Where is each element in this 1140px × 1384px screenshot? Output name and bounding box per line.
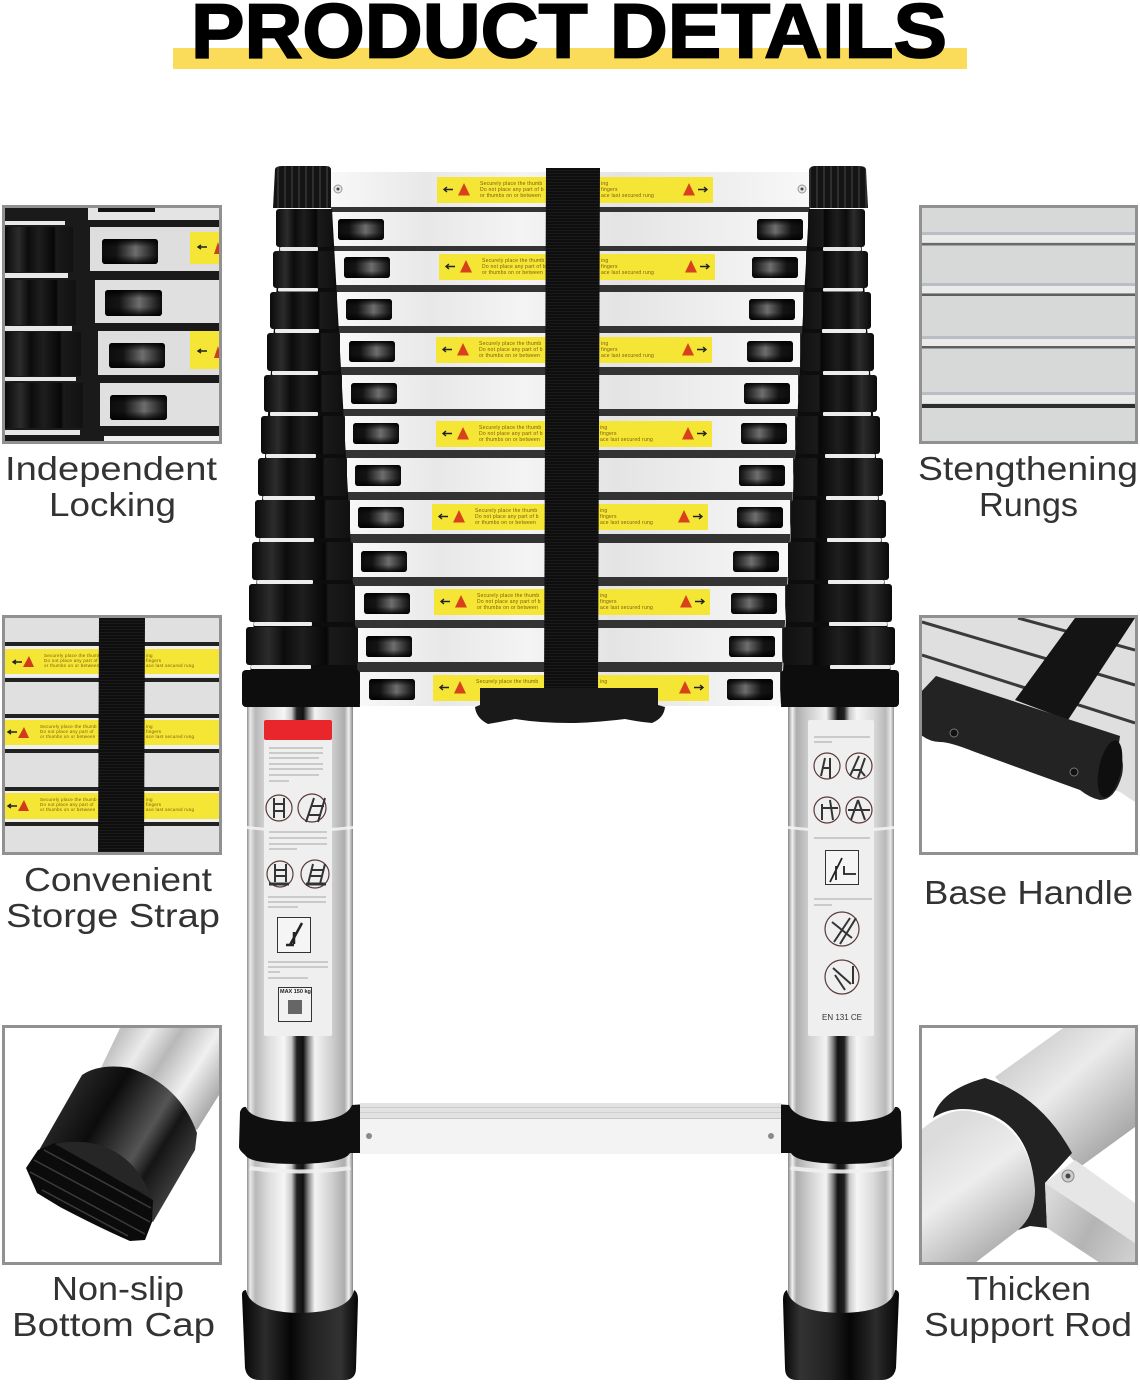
yellow warning labels: or thumbs on or between	[477, 605, 538, 611]
label: Non-slip Bottom Cap: Bottom Cap	[12, 1306, 215, 1343]
yellow warning labels: ace last secured rung	[600, 605, 653, 611]
left safety sticker: MAX 150 kg	[280, 989, 311, 995]
panel: convenient storage strap: Do not place any part of	[40, 802, 94, 807]
panel: thicken support rod	[920, 1026, 1136, 1264]
yellow warning labels: or thumbs on or between	[480, 193, 541, 199]
label: Convenient Storge Strap: Storge Strap	[6, 897, 220, 934]
label: Non-slip Bottom Cap	[12, 1270, 215, 1343]
bottom support rod	[360, 1103, 781, 1154]
yellow warning labels: Securely place the thumb	[477, 593, 539, 599]
label: Independent Locking: Locking	[49, 486, 176, 523]
panel: convenient storage strap: fingers	[146, 802, 162, 807]
yellow warning labels: Do not place any part of b	[482, 264, 546, 270]
base handle	[475, 688, 665, 724]
label: Stengthening Rungs: Stengthening	[918, 450, 1138, 487]
yellow warning labels: Securely place the thumb	[479, 341, 541, 347]
yellow warning labels: or thumbs on or between	[482, 270, 543, 276]
panel: base handle	[920, 616, 1136, 854]
yellow warning labels: Do not place any part of b	[479, 347, 543, 353]
panel: convenient storage strap: Do not place any part of	[40, 729, 94, 734]
yellow warning labels: fingers	[601, 347, 618, 353]
yellow warning labels: fingers	[600, 599, 617, 605]
yellow warning labels: ing	[601, 258, 608, 264]
yellow warning labels: Securely place the thumb	[482, 258, 544, 264]
yellow warning labels	[432, 177, 715, 701]
yellow warning labels: fingers	[600, 514, 617, 520]
yellow warning labels: Do not place any part of b	[475, 514, 539, 520]
yellow warning labels: ing	[600, 425, 607, 431]
yellow warning labels: ing	[600, 508, 607, 514]
label: Non-slip Bottom Cap: Non-slip	[52, 1270, 184, 1307]
panel: convenient storage strap: ace last secured rung	[146, 734, 195, 739]
rung lock buttons	[338, 219, 803, 700]
yellow warning labels: or thumbs on or between	[479, 353, 540, 359]
panel: convenient storage strap: or thumbs on or between	[40, 734, 96, 739]
label: Thicken Support Rod	[924, 1270, 1132, 1343]
panel: convenient storage strap: ace last secured rung	[146, 807, 195, 812]
panel: convenient storage strap: fingers	[146, 729, 162, 734]
yellow warning labels: ace last secured rung	[601, 270, 654, 276]
central telescopic ladder	[239, 166, 902, 1380]
yellow warning labels: or thumbs on or between	[479, 437, 540, 443]
yellow warning labels: or thumbs on or between	[475, 520, 536, 526]
right safety sticker	[808, 720, 874, 1036]
yellow warning labels: ing	[601, 341, 608, 347]
panel: convenient storage strap: ing	[146, 797, 153, 802]
yellow warning labels: ace last secured rung	[600, 437, 653, 443]
yellow warning labels: Securely place the thumb	[475, 508, 537, 514]
yellow warning labels: ace last secured rung	[600, 520, 653, 526]
label: Base Handle: Base Handle	[924, 874, 1133, 911]
label: Stengthening Rungs	[918, 450, 1138, 523]
panel: convenient storage strap: or thumbs on or between	[40, 807, 96, 812]
label: Thicken Support Rod: Thicken	[966, 1270, 1091, 1307]
panel: independent locking	[4, 206, 222, 442]
yellow warning labels: Do not place any part of b	[480, 187, 544, 193]
panel: convenient storage strap: ing	[146, 653, 153, 658]
yellow warning labels: ing	[601, 181, 608, 187]
panel: strengthening rungs	[920, 206, 1136, 442]
yellow warning labels: ace last secured rung	[601, 353, 654, 359]
yellow warning labels: ing	[600, 593, 607, 599]
black side collars	[242, 209, 899, 707]
panel: convenient storage strap: Securely place the thumb	[44, 653, 101, 658]
top ribbed end caps	[273, 166, 868, 208]
yellow warning labels: Securely place the thumb	[480, 181, 542, 187]
yellow warning labels: Securely place the thumb	[476, 679, 538, 685]
rungs	[331, 172, 810, 706]
right safety sticker: EN 131 CE	[822, 1013, 862, 1022]
label: Convenient Storge Strap	[6, 861, 220, 934]
yellow warning labels: Do not place any part of b	[477, 599, 541, 605]
ladder left and right legs	[239, 700, 902, 1380]
yellow warning labels: fingers	[601, 187, 618, 193]
yellow warning labels: ing	[600, 679, 607, 685]
panel: convenient storage strap: ing	[146, 724, 153, 729]
yellow warning labels: Do not place any part of b	[479, 431, 543, 437]
panel: non-slip bottom cap	[4, 1026, 220, 1264]
label: Stengthening Rungs: Rungs	[979, 486, 1078, 523]
label: Convenient Storge Strap: Convenient	[24, 861, 212, 898]
yellow warning labels: fingers	[600, 431, 617, 437]
panel: convenient storage strap: Securely place the thumb	[40, 724, 97, 729]
yellow warning labels: fingers	[601, 264, 618, 270]
panel: convenient storage strap: fingers	[146, 658, 162, 663]
label: Independent Locking: Independent	[5, 450, 217, 487]
left safety sticker	[264, 720, 332, 1036]
rung backing	[331, 205, 810, 706]
panel: convenient storage strap: Securely place the thumb	[40, 797, 97, 802]
storage strap	[544, 168, 600, 692]
label: Thicken Support Rod: Support Rod	[924, 1306, 1132, 1343]
panel: convenient storage strap: or thumbs on or between	[44, 663, 100, 668]
yellow warning labels: Securely place the thumb	[479, 425, 541, 431]
panel: convenient storage strap: ace last secured rung	[146, 663, 195, 668]
label: Independent Locking	[5, 450, 217, 523]
panel: convenient storage strap	[4, 616, 220, 854]
yellow warning labels: ace last secured rung	[601, 193, 654, 199]
panel: convenient storage strap: Do not place any part of	[44, 658, 98, 663]
